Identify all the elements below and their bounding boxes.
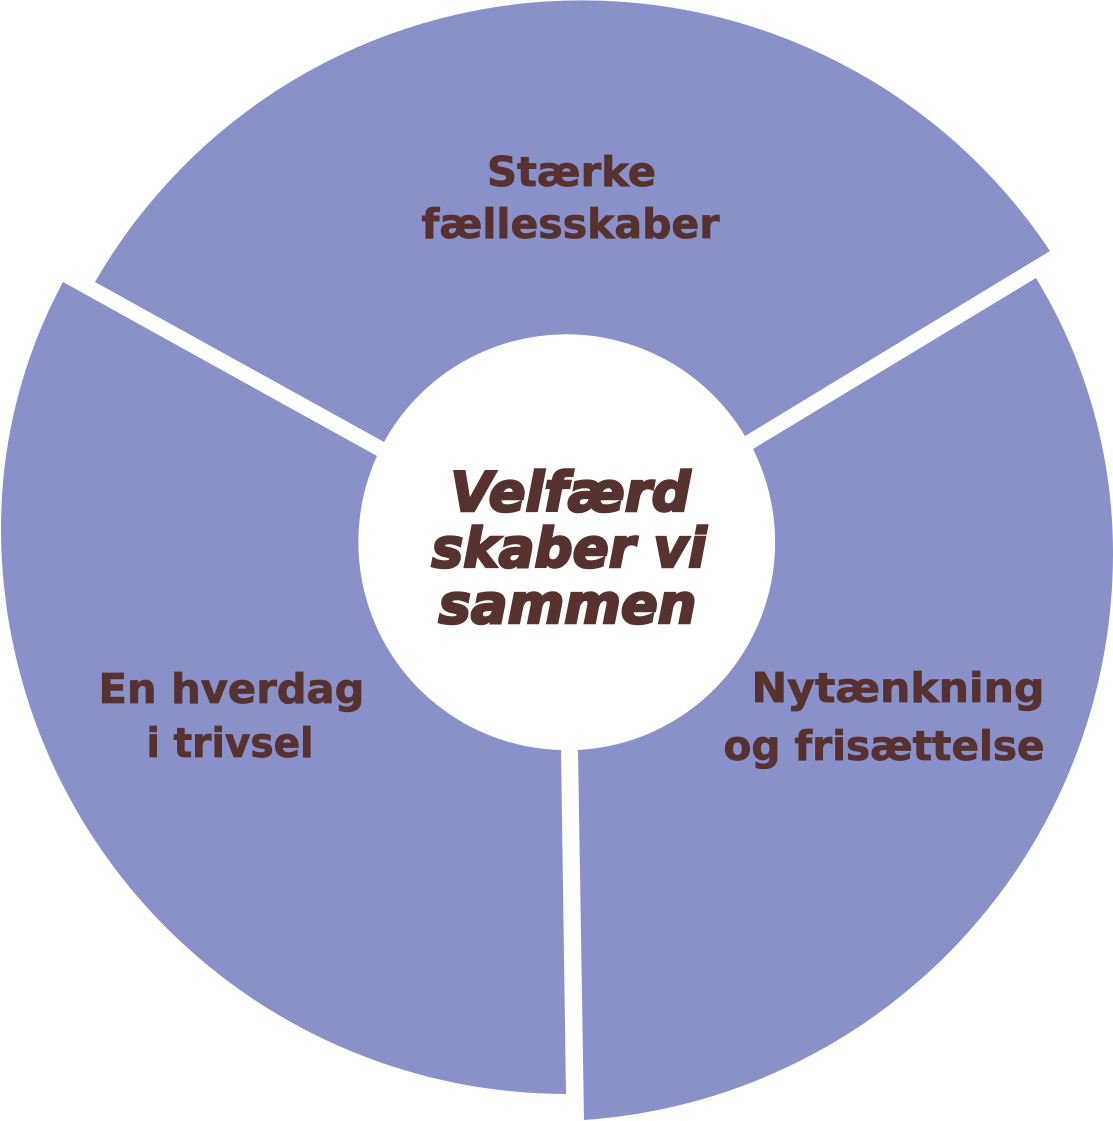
segment: Nytænkning og frisættelse: Nytænkning xyxy=(752,664,1044,712)
segment: En hverdag i trivsel xyxy=(1,282,566,1094)
center label: Velfærd skaber vi sammen: sammen xyxy=(438,573,696,636)
segment: Nytænkning og frisættelse xyxy=(578,278,1113,1120)
segment: En hverdag i trivsel: En hverdag xyxy=(98,665,364,713)
center label: Velfærd skaber vi sammen: skaber vi xyxy=(432,517,708,580)
segment: Nytænkning og frisættelse: og frisættelse xyxy=(724,722,1044,770)
segment: Stærke fællesskaber xyxy=(95,0,1050,442)
center label: Velfærd skaber vi sammen: Velfærd xyxy=(450,461,692,524)
segment: Stærke fællesskaber: fællesskaber xyxy=(422,200,720,248)
center label: Velfærd skaber vi sammen xyxy=(432,461,708,636)
segment: Stærke fællesskaber: Stærke xyxy=(487,148,656,196)
segment: En hverdag i trivsel: i trivsel xyxy=(146,719,314,767)
